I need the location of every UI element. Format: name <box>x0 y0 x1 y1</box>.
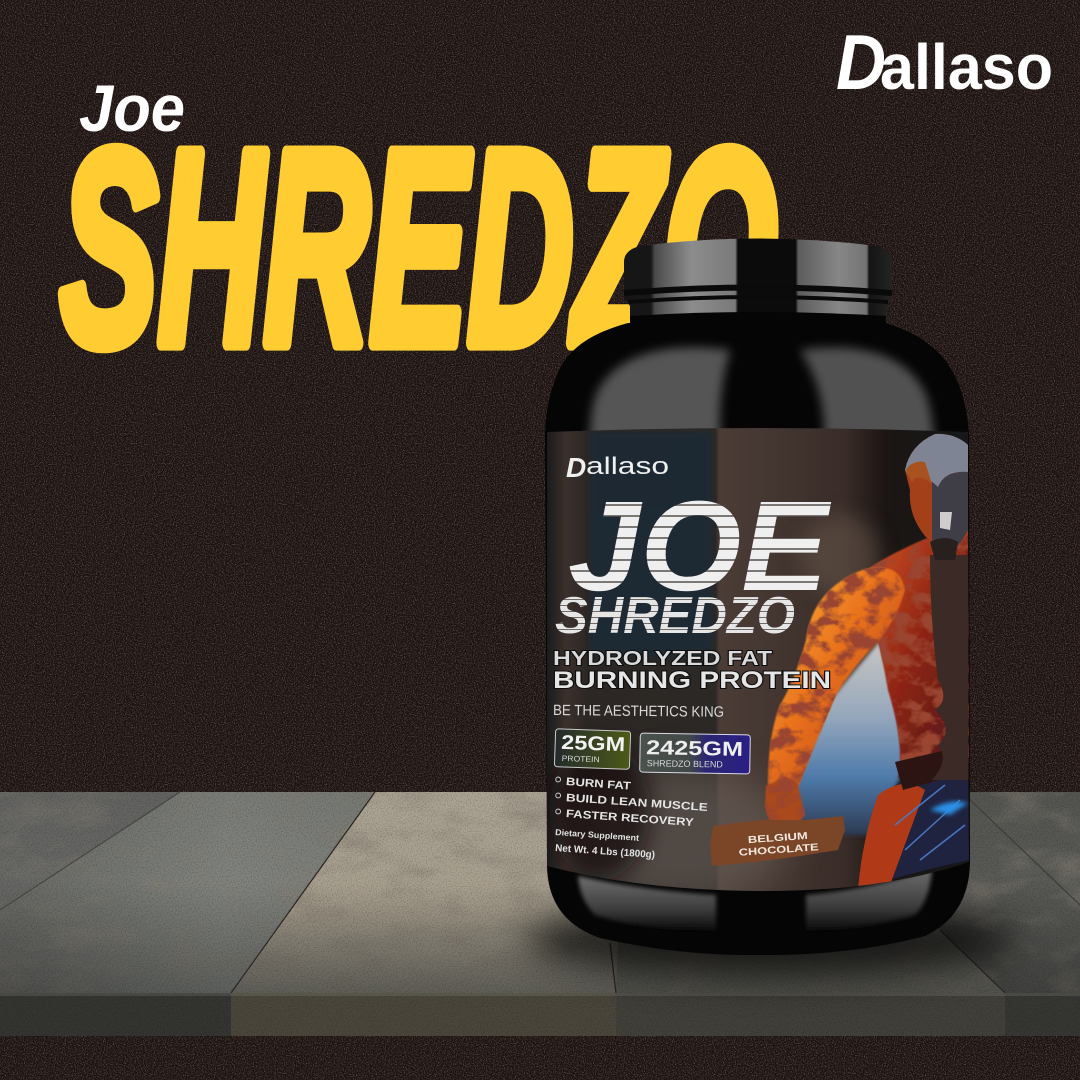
label logo: Dallaso <box>566 456 668 477</box>
athlete pants <box>858 770 969 890</box>
flavor badge: Belgium Chocolate <box>710 816 845 866</box>
label logo: Dallaso: allaso <box>586 453 669 480</box>
benefits list: BUILD LEAN MUSCLE <box>566 792 708 814</box>
illustration: flaming athlete <box>765 434 969 890</box>
logo: Dallaso <box>836 18 1053 106</box>
wooden shelf <box>0 792 1080 1036</box>
benefits list: BURN FAT <box>566 776 632 793</box>
athlete flaming arm <box>768 568 905 790</box>
label: product name line 1: HYDROLYZED FAT <box>553 648 772 670</box>
benefits list <box>555 775 708 829</box>
badge: 25GM protein <box>554 729 631 769</box>
label: product name line 2: BURNING PROTEIN <box>553 667 831 694</box>
label logo: Dallaso: D <box>566 452 586 483</box>
badge: 25GM protein: 25GM <box>561 732 626 756</box>
athlete torso <box>860 530 969 778</box>
logo: Dallaso: allaso <box>880 31 1053 103</box>
jar shadow on shelf <box>525 902 1015 978</box>
label title: JOE: JOE <box>568 475 832 618</box>
label: dietary info: Net Wt. 4 Lbs (1800g) <box>555 843 655 861</box>
badge: 2425GM shredzo blend: 2425GM <box>646 737 743 761</box>
jar lid <box>624 238 892 328</box>
flavor badge: Belgium Chocolate: BELGIUM <box>748 831 808 846</box>
label: dietary info: Dietary Supplement <box>555 827 640 843</box>
badge: 2425GM shredzo blend <box>640 733 750 774</box>
product jar <box>545 238 971 955</box>
shelf front edge <box>0 993 1080 1036</box>
label background <box>545 425 971 905</box>
athlete head <box>905 434 968 560</box>
jar label <box>545 425 971 905</box>
label: dietary info <box>556 829 654 860</box>
badge: 25GM protein: PROTEIN <box>562 754 600 764</box>
label: tagline: BE THE AESTHETICS KING <box>553 702 724 721</box>
athlete fist <box>764 778 806 820</box>
title: Joe: Joe <box>79 71 185 145</box>
title: SHREDZO: SHREDZO <box>60 94 777 403</box>
jar shoulder highlights <box>590 347 934 440</box>
benefits list: FASTER RECOVERY <box>566 808 695 829</box>
label title: SHREDZO: SHREDZO <box>555 587 795 645</box>
jar body <box>545 323 970 955</box>
athlete spine shadow <box>930 555 968 780</box>
illustration: sky behind athlete <box>798 642 901 837</box>
flavor badge: Belgium Chocolate: CHOCOLATE <box>738 842 819 859</box>
jar bottom highlights <box>578 868 932 930</box>
shelf top surface <box>0 792 1080 993</box>
badge: 2425GM shredzo blend: SHREDZO BLEND <box>647 758 723 769</box>
logo: Dallaso: D <box>836 18 886 106</box>
